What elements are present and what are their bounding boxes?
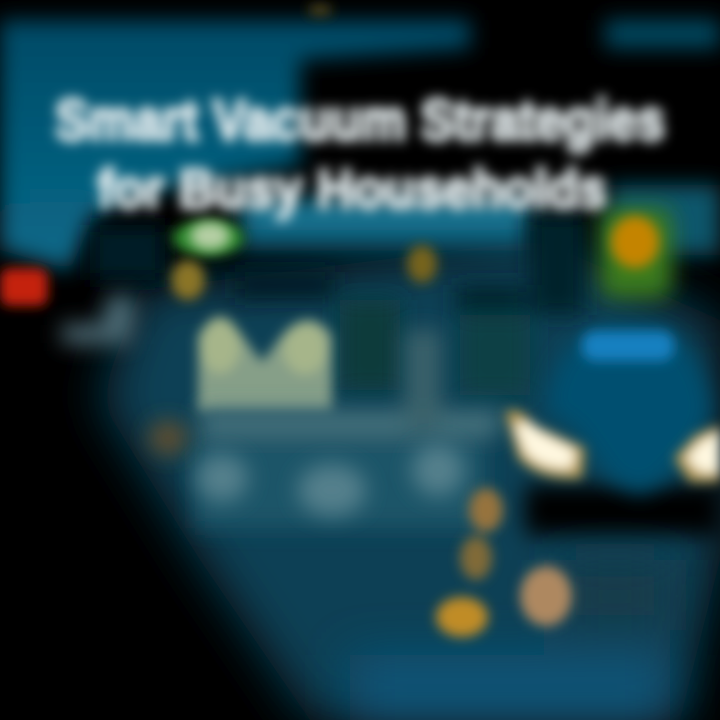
title: for Busy Households	[97, 157, 607, 220]
car windshield	[582, 331, 674, 361]
panel: bottom teal road	[350, 560, 670, 720]
icon: brown dot	[148, 420, 188, 456]
panel: top-left teal area	[0, 20, 720, 270]
icon: green and orange badge	[600, 208, 672, 298]
chart: pale twin-peak shape	[198, 317, 332, 412]
panel: grey-blue lower band	[195, 330, 500, 528]
icon: red badge	[0, 268, 48, 306]
panel: teal band under title	[240, 200, 530, 250]
text block: lower blurred labels	[196, 444, 464, 516]
small top amber marker	[308, 5, 332, 15]
icons: amber dots trail	[436, 488, 572, 637]
car body	[545, 328, 712, 495]
car left headlight	[505, 410, 585, 479]
icon: amber dot upper middle	[407, 245, 437, 283]
background: teal wash	[100, 240, 720, 720]
illustration: blue car	[505, 328, 720, 535]
icon: green and amber marker	[171, 220, 244, 300]
car shadow	[525, 485, 720, 535]
dark panel: middle strip	[90, 215, 585, 395]
text block: grey left label	[62, 294, 136, 344]
title	[55, 88, 665, 220]
car right headlight	[674, 425, 720, 482]
